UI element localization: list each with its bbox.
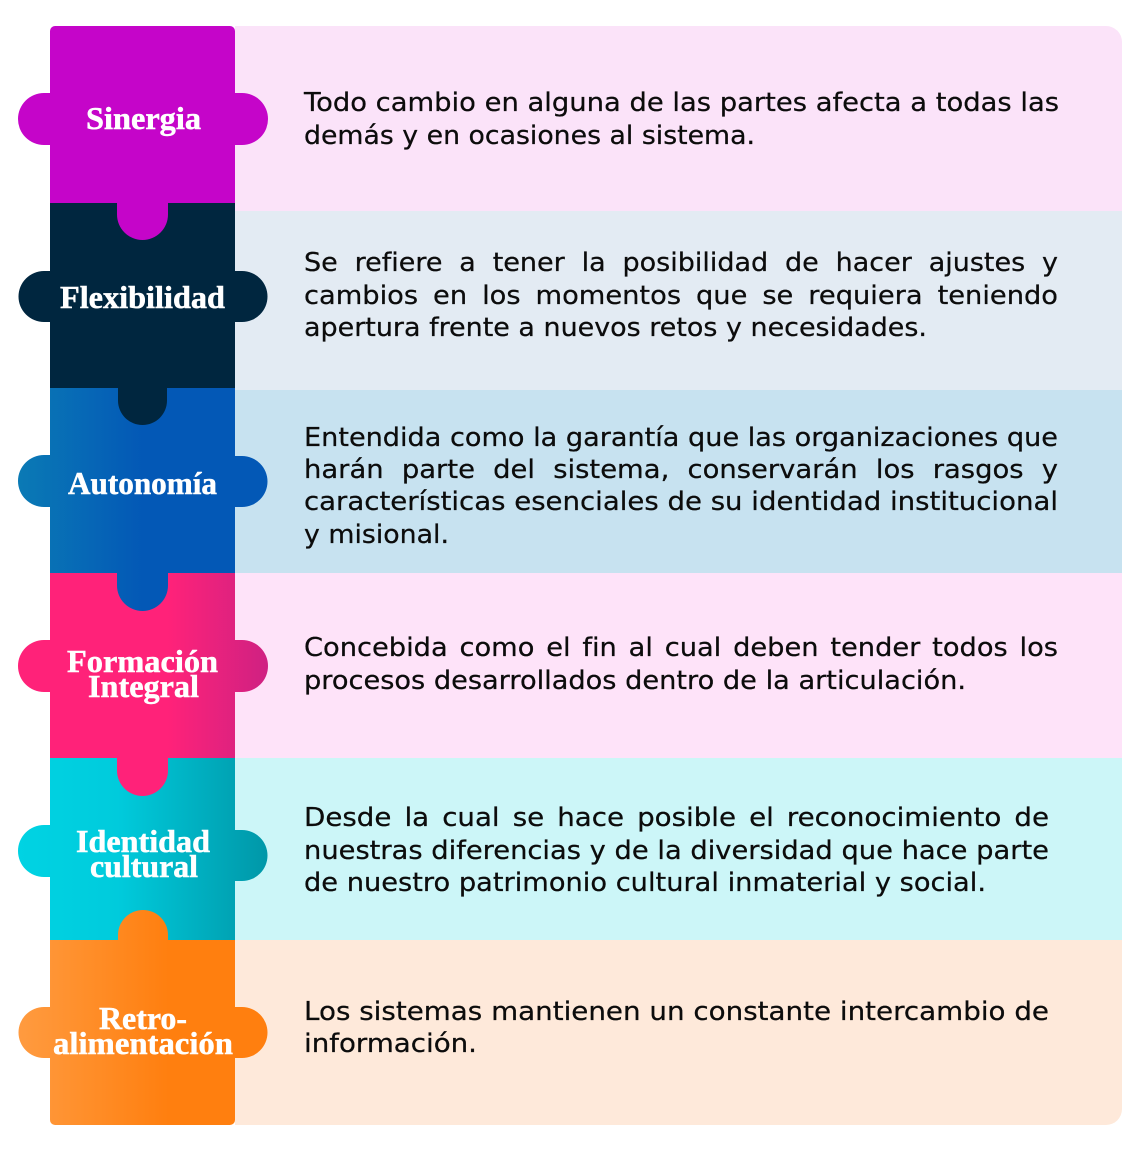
panel backgrounds (235, 26, 1122, 1125)
text block: Identidad cultural: Desde la cual se hace posible el reconocimiento de (304, 803, 1049, 833)
heading: Flexibilidad: Flexibilidad (60, 279, 225, 315)
puzzle piece: Identidad cultural (18, 758, 268, 941)
text block: Sinergia: Todo cambio en alguna de las partes afecta a todas las (303, 88, 1059, 118)
text block: Identidad cultural: de nuestro patrimonio cultural inmaterial y social. (304, 868, 986, 898)
text block: Flexibilidad: Se refiere a tener la posibilidad de hacer ajustes y (304, 248, 1058, 278)
heading: Identidad cultural (76, 823, 210, 884)
text block: Autonomia (304, 423, 1058, 550)
text block: Retroalimentacion: Los sistemas mantienen un constante intercambio de (304, 997, 1049, 1027)
puzzle piece: Autonomia (18, 388, 268, 611)
text block: Sinergia: demás y en ocasiones al sistema. (304, 121, 755, 151)
text block: Retroalimentacion: información. (304, 1029, 477, 1059)
text block: Formacion Integral (304, 633, 1058, 696)
heading: Retroalimentacion (53, 1000, 233, 1061)
heading: Sinergia: Sinergia (86, 100, 201, 136)
text block: Formacion Integral: procesos desarrollados dentro de la articulación. (304, 666, 966, 696)
text block: Retroalimentacion (304, 997, 1049, 1059)
heading: Retroalimentacion: Retro- (99, 1000, 187, 1036)
heading: Formacion Integral: Formación (67, 643, 218, 679)
puzzle piece: Flexibilidad (18, 203, 268, 425)
text block: Flexibilidad: apertura frente a nuevos retos y necesidades. (304, 313, 927, 343)
heading: Formacion Integral: Integral (88, 668, 199, 704)
puzzle piece: Sinergia (18, 26, 268, 240)
heading: Autonomia: Autonomía (68, 465, 217, 501)
text block: Flexibilidad (304, 248, 1058, 343)
text block: Autonomia: y misional. (304, 520, 449, 550)
heading: Retroalimentacion: alimentación (53, 1025, 233, 1061)
text block: Sinergia (303, 88, 1059, 151)
puzzle piece: Retroalimentacion (18, 910, 268, 1125)
text block: Identidad cultural (304, 803, 1049, 898)
text block: Flexibilidad: cambios en los momentos que se requiera teniendo (304, 281, 1058, 311)
heading: Formacion Integral (67, 643, 218, 704)
puzzle piece: Formacion Integral (18, 573, 268, 796)
heading: Identidad cultural: Identidad (76, 823, 210, 859)
heading: Identidad cultural: cultural (90, 848, 198, 884)
text block: Autonomia: harán parte del sistema, conservarán los rasgos y (304, 455, 1058, 485)
text block: Autonomia: características esenciales de su identidad institucional (304, 487, 1058, 517)
text block: Identidad cultural: nuestras diferencias y de la diversidad que hace parte (304, 836, 1049, 866)
text block: Formacion Integral: Concebida como el fin al cual deben tender todos los (304, 633, 1058, 663)
text block: Autonomia: Entendida como la garantía que las organizaciones que (304, 423, 1058, 453)
